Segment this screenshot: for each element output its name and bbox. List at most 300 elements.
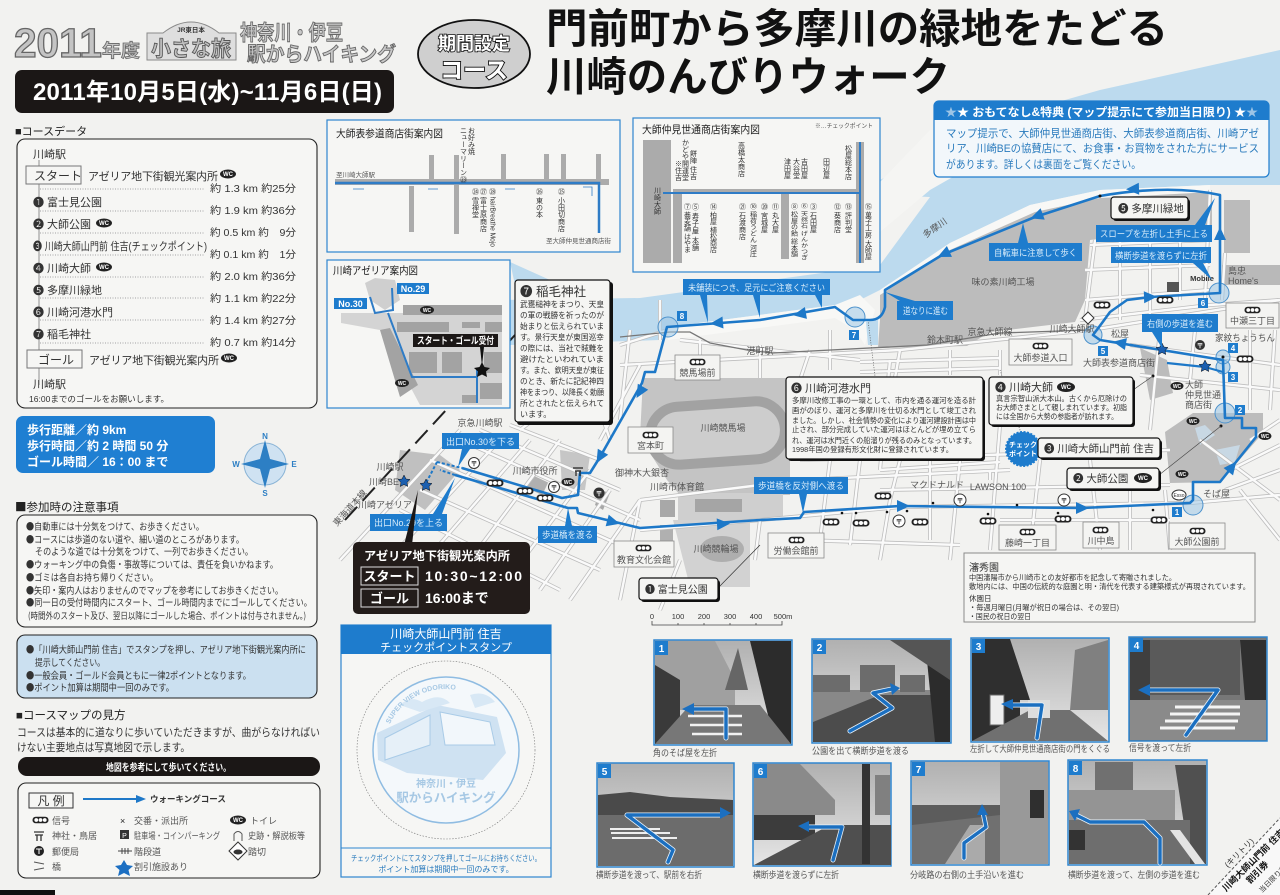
photo 8	[1068, 760, 1207, 865]
callout: 富士見公園: ❶ 富士見公園	[645, 583, 708, 596]
coupon corner: (キリトリ)	[1223, 836, 1256, 869]
legend: 割引施設あり	[134, 861, 188, 872]
caption 2: 公園を出て横断歩道を渡る	[812, 745, 909, 756]
panel: course data: WC	[99, 265, 110, 271]
main title	[546, 6, 1168, 100]
inset map: 大師仲見世通商店街: 吉田屋	[800, 158, 808, 180]
inset map: 大師仲見世通商店街: かどや開運堂	[682, 139, 689, 181]
signal stop labels: 川中島	[1087, 535, 1115, 546]
scale bar: 0	[650, 612, 654, 621]
map: place names: 味の素川崎工場	[971, 276, 1035, 287]
signal stop labels: 教育文化会館	[617, 554, 671, 565]
panel: course data: 約 0.5 km 約 9分	[210, 226, 296, 239]
inset map: 大師表参道商店街: ㉕ 小田切商店	[558, 188, 565, 233]
callout: 川崎河港水門: 画がのぼり、運河と多摩川を仕切る水門として竣工され	[792, 405, 976, 415]
map: place names: 仲見世通	[1185, 389, 1221, 400]
inset map: 大師仲見世通商店街: ⑳ 宮城屋	[760, 203, 768, 234]
scale bar	[650, 612, 792, 625]
inset map: 大師表参道商店街: 至大師仲見世通商店街	[546, 236, 612, 245]
panel: walking stats: 歩行時間／約 2 時間 50 分	[27, 438, 168, 453]
panel: course data: アゼリア地下街観光案内所	[88, 169, 218, 183]
inset map: 大師仲見世通商店街: 津田屋	[784, 158, 791, 180]
inset map: 大師仲見世通商店街: 大師仲見世通商店街案内図	[642, 123, 760, 136]
map: place names: 大師表参道商店街	[1083, 357, 1155, 368]
blue direction labels: 歩道橋を反対側へ渡る	[758, 480, 844, 491]
text block: how to read the map: けない主要地点は写真地図で示します。	[17, 740, 190, 754]
callout: 川崎大師: ❹ 川崎大師	[995, 380, 1053, 394]
map: place names: 松屋	[1111, 328, 1129, 339]
panel: cautions: ■参加時の注意事項	[15, 499, 119, 515]
panel: check point stamp	[340, 624, 552, 878]
callout: 大師公園: ❷ 大師公園	[1073, 472, 1128, 485]
legend: 階段道	[134, 846, 161, 857]
legend: 交番・派出所	[134, 815, 188, 826]
route point numbers: 4	[1231, 344, 1236, 353]
inset map: 川崎アゼリア: WC	[398, 381, 407, 387]
factory and grey blocks	[878, 192, 1212, 348]
photo 5	[597, 763, 734, 867]
callout: 稲毛神社: す。また、欽明天皇が東征	[520, 365, 604, 375]
legend: WC	[233, 818, 244, 824]
inset map: 大師仲見世通商店街: ⑮ 菓子工房 大師屋	[864, 203, 872, 261]
map: place names: 川崎市体育館	[650, 481, 704, 492]
panel: cautions: ●自動車には十分気をつけて、お歩きください。	[26, 519, 204, 533]
signal stop labels: 大師公園前	[1174, 536, 1220, 547]
caption 6: 横断歩道を渡らずに左折	[753, 869, 839, 880]
banner: use map: 地図を参考にして歩いてください。	[106, 761, 231, 774]
callout: 稲毛神社: います。	[520, 410, 551, 419]
photo 7: 7	[916, 765, 922, 776]
photo 8: 8	[1073, 764, 1079, 775]
header logo: 2011年度 JR東日本 小さな旅: 2011	[14, 20, 102, 66]
decorative edge	[0, 890, 55, 895]
inset map: 大師表参道商店街: ニューマリーン㉓	[460, 127, 467, 183]
panel: hospitality benefits: ★★ おもてなし&特典 (マップ提示にて参加当日限り) ★ ★	[945, 105, 1259, 119]
map: place names: LAWSON 100	[970, 482, 1026, 492]
legend: トイレ	[250, 816, 277, 826]
map: traffic signals and small icons: 〒	[1196, 343, 1204, 350]
route point numbers: 8	[680, 312, 685, 321]
badge: 期間設定コース	[418, 20, 530, 88]
panel: hospitality benefits	[934, 101, 1269, 177]
callout: 川崎河港水門	[786, 377, 985, 461]
date banner	[15, 70, 394, 113]
blue direction labels: 未舗装につき、足元にご注意ください	[688, 282, 825, 293]
panel: check point stamp: チェックポイントスタンプ	[380, 641, 512, 654]
stamp artwork: 駅からハイキング	[396, 790, 496, 805]
panel: cautions: ●ゴミは各自お持ち帰りください。	[26, 570, 158, 584]
caption 4: 信号を渡って左折	[1129, 742, 1191, 753]
callout: 川崎大師	[989, 376, 1153, 427]
map: racecourse and facilities	[395, 200, 1280, 587]
callout: 川崎大師山門前 住吉: ❸ 川崎大師山門前 住吉	[1044, 442, 1154, 455]
blue direction labels: 歩道橋を渡る	[542, 529, 593, 540]
legend: 神社・鳥居	[52, 830, 97, 841]
signal stop labels: 大師参道入口	[1013, 352, 1068, 363]
main title: 川崎のんびりウォーク	[546, 54, 950, 100]
callout: 川崎河港水門: ました。しかし、社会情勢の変化により運河建設計画は中	[792, 415, 976, 425]
route point numbers: 3	[1231, 373, 1236, 382]
callout: 川崎河港水門: ❻ 川崎河港水門	[791, 381, 871, 395]
badge: 期間設定コース: コース	[440, 57, 508, 83]
callout: 稲毛神社: 始まりと伝えられていま	[520, 321, 604, 331]
blue direction labels: 横断歩道を渡らずに左折	[1115, 250, 1207, 261]
inset map: 大師仲見世通商店街: ㉑ 石渡商店	[738, 203, 746, 241]
panel: cautions: ●ウォーキング中の負傷・事故等については、責任を負いかねます。	[26, 557, 278, 571]
info box: 瀋秀園	[964, 553, 1255, 622]
stamp artwork: SUPER VIEW ODORIKO	[386, 684, 456, 724]
blue direction labels	[370, 198, 1218, 543]
inset map: 大師仲見世通商店街: ※住吉	[674, 160, 682, 182]
callout: 川崎河港水門: 止され、部分完成していた運河はほとんどが埋め立てら	[792, 424, 976, 434]
map: place names	[330, 215, 1275, 554]
route direction arrows	[591, 183, 1241, 530]
route point numbers: 5	[1101, 347, 1106, 356]
map: place names: 川崎市役所	[512, 465, 558, 476]
panel: hospitality benefits: があります。詳しくは裏面をご覧ください。	[946, 157, 1141, 171]
panel: stamp notes: ●一般会員・ゴールド会員ともに一律2ポイントとなります。	[26, 668, 251, 682]
map: place names: そば屋	[1203, 489, 1230, 499]
callout: 川崎大師: には全国から大勢の参詣者が訪れます。	[996, 411, 1118, 421]
blue direction labels: 自転車に注意して歩く	[994, 247, 1077, 258]
map: place names: 大師	[1185, 379, 1203, 390]
photo 2	[812, 639, 951, 743]
inset map: 川崎アゼリア: WC	[423, 308, 432, 314]
panel: cautions: (時間外のスタート及び、翌日以降にゴールした場合、ポイントは付与されません。)	[28, 609, 306, 622]
callout: start and goal times: 10:30~12:00	[425, 568, 522, 584]
icon: compass	[232, 432, 297, 498]
date banner: 2011年10月5日(水)~11月6日(日)	[33, 79, 382, 106]
info box: 瀋秀園: 敷地内には、中国の伝統的な庭園と明・清代を代表する建築様式が再現されています。	[969, 581, 1250, 591]
inset map: 川崎アゼリア: 川崎アゼリア案内図	[333, 264, 418, 277]
blue direction labels: 出口No.30を下る	[446, 436, 515, 447]
panel: course data: 16:00までのゴールをお願いします。	[29, 394, 169, 404]
map: place names: Home's	[1228, 276, 1259, 286]
callout: 大師公園: WC	[1138, 476, 1149, 482]
photo 1	[654, 640, 792, 745]
banner: use map	[18, 757, 320, 776]
scale bar: 400	[750, 612, 762, 621]
inset map: 大師表参道商店街: 大師表参道商店街案内図	[336, 127, 443, 140]
inset map: 大師表参道商店街: ㉘ hairBreathe Mojo	[488, 188, 496, 247]
callout: 川崎大師: 真言宗智山派大本山。古くから厄除けの	[996, 393, 1127, 403]
inset map: 大師仲見世通商店街: ⑫ 葵商店	[834, 203, 841, 234]
map: place names: 港町駅	[746, 345, 774, 356]
map: place names: 川崎大師駅	[1049, 323, 1095, 334]
coupon corner: 割引券	[1244, 859, 1271, 885]
stamp artwork	[356, 660, 536, 840]
icon: compass: W	[232, 460, 240, 469]
panel: cautions: ●コースには歩道のない道や、細い道のところがあります。	[26, 532, 244, 546]
callout: 稲毛神社: 所とされたと伝えられて	[520, 398, 604, 408]
inset map: 大師仲見世通商店街: 松屋総本店	[844, 144, 852, 181]
panel: course data: ❸ 川崎大師山門前 住吉(チェックポイント)	[33, 239, 207, 253]
panel: course data: ❻ 川崎河港水門	[33, 305, 113, 319]
photo 2: 2	[817, 643, 823, 654]
map: traffic signals and small icons: 〒	[956, 498, 964, 505]
map base: river and land	[500, 50, 1280, 348]
blue direction labels: 出口No.29を上る	[374, 517, 443, 528]
info box: 瀋秀園: ・毎週月曜日(月曜が祝日の場合は、その翌日)	[969, 602, 1119, 612]
caption 1: 角のそば屋を左折	[653, 747, 717, 758]
scale bar: 500m	[774, 612, 792, 621]
map: place names: 川崎競馬場	[700, 422, 746, 433]
photo 3	[971, 638, 1109, 742]
header logo: 2011年度 JR東日本 小さな旅: 駅からハイキング	[247, 42, 396, 66]
signal stop labels	[614, 303, 1279, 567]
signal stop labels: 中瀬三丁目	[1230, 315, 1275, 326]
route point numbers: 7	[852, 331, 857, 340]
legend	[18, 783, 320, 878]
inset map: 大師表参道商店街: ㉖ 東の本	[536, 188, 543, 219]
inset map: 川崎アゼリア: No.29	[401, 284, 425, 294]
map: place names: 多摩川	[920, 215, 949, 240]
map: traffic signals and small icons: 〒	[550, 485, 558, 492]
icon: compass: S	[262, 489, 268, 498]
inset map: 大師仲見世通商店街: ※…チェックポイント	[815, 122, 873, 130]
info box: 瀋秀園: ・国民の祝日の翌日	[969, 611, 1031, 621]
photo 6	[753, 763, 891, 866]
inset map: 大師仲見世通商店街: ⑤ 寿子屋 本舗	[692, 203, 699, 252]
map: place names: 川崎アゼリア	[358, 499, 412, 510]
callout: start and goal times: 16:00まで	[425, 590, 489, 606]
panel: course data: WC	[223, 172, 234, 178]
caption 5: 横断歩道を渡って、駅前を右折	[596, 869, 702, 880]
route point numbers: 1	[1175, 508, 1180, 517]
caption 7: 分岐路の右側の土手沿いを進む	[910, 869, 1024, 880]
photo 4	[1129, 637, 1267, 741]
panel: course data: 川崎駅	[33, 377, 66, 391]
header logo: 2011年度 JR東日本 小さな旅: 小さな旅	[151, 38, 231, 61]
header logo: 2011年度 JR東日本 小さな旅: 年度	[102, 40, 140, 61]
inset map: 川崎アゼリア: スタート・ゴール受付	[417, 335, 494, 347]
legend: 史跡・解説板等	[248, 830, 305, 841]
legend: 橋	[52, 861, 61, 872]
map: place names: 商店街	[1185, 399, 1212, 410]
panel: course data: 川崎駅	[33, 147, 66, 161]
panel: stamp notes: ●「川崎大師山門前 住吉」でスタンプを押し、アゼリア地下街観光案内所に	[26, 642, 306, 656]
info box: 瀋秀園: 中国瀋陽市から川崎市との友好都市を記念して寄贈されました。	[969, 572, 1176, 582]
panel: hospitality benefits: マップ提示で、大師仲見世通商店街、大師表参道商店街、川崎アゼ	[946, 126, 1259, 140]
caption 3: 左折して大師仲見世通商店街の門をくぐる	[970, 743, 1110, 754]
panel: check point stamp: 川崎大師山門前 住吉	[390, 626, 502, 641]
inset map: 大師表参道商店街: ㉗ 富士原商店	[480, 188, 487, 233]
route point numbers: 2	[1238, 406, 1243, 415]
map: place names: 京急川崎駅	[457, 417, 503, 428]
panel: cautions	[15, 499, 317, 627]
signal stop labels: 藤崎一丁目	[1005, 537, 1050, 548]
map: place names: 川崎駅	[376, 461, 404, 472]
map: traffic signals and small icons: WC	[1261, 434, 1270, 440]
callout: 稲毛神社: 神をまつり、以降長く勅願	[520, 387, 604, 397]
map: traffic signals and small icons: 〒	[896, 519, 902, 526]
panel: stamp notes: ●ポイント加算は期間中一回のみです。	[26, 680, 174, 694]
panel: walking stats: 歩行距離／約 9km	[27, 422, 126, 437]
check point badge	[1006, 432, 1040, 466]
map: traffic signals and small icons: WC	[1173, 384, 1182, 390]
header logo: 2011年度 JR東日本 小さな旅: JR東日本	[177, 25, 205, 34]
panel: check point stamp: チェックポイントにてスタンプを押してゴールにお持ちください。	[351, 853, 541, 863]
panel: cautions: ●同一日の受付時間内にスタート、ゴール時間内までにゴールしてください。	[26, 595, 312, 609]
map: point circles	[658, 283, 1235, 515]
map: traffic signals and small icons: 〒	[596, 491, 602, 498]
signal stop labels: 競馬場前	[679, 367, 716, 378]
caption 8: 横断歩道を渡って、左側の歩道を進む	[1068, 869, 1200, 880]
panel: course data: ■コースデータ	[15, 124, 87, 138]
inset map: 大師仲見世通商店街: ⑦ 蕎麦舗 はやま	[684, 203, 691, 253]
info box: 瀋秀園: 瀋秀園	[969, 561, 999, 574]
legend: 駐車場・コインパーキング	[134, 830, 220, 841]
text block: how to read the map: コースは基本的に道なりに歩いていただきますが、曲がらなければい	[17, 725, 320, 739]
panel: check point stamp: ポイント加算は期間中一回のみです。	[378, 864, 514, 874]
panel: course data: スタート	[34, 169, 82, 183]
panel: course data: 約 2.0 km 約36分	[210, 270, 296, 283]
map: place names: 御神木大銀杏	[615, 467, 669, 478]
signal stop labels: 労働会館前	[773, 545, 819, 556]
legend: 踏切	[248, 846, 266, 857]
photo 6: 6	[758, 767, 764, 778]
check point badge: ポイント	[1009, 450, 1037, 458]
callout: 大師公園	[1067, 426, 1221, 491]
inset map: 大師仲見世通商店街: ⑥ 天然石 げんかつぎ	[800, 203, 808, 260]
map: traffic signals and small icons: 〒	[1060, 498, 1068, 505]
map: place names: 家紋ちょうちん	[1215, 332, 1275, 343]
callout: 稲毛神社: の軍の戦勝を祈ったのが	[520, 310, 604, 320]
legend: ×	[120, 816, 125, 826]
info box: 瀋秀園: 休園日	[969, 593, 992, 603]
map: traffic signals and small icons: WC	[564, 480, 573, 486]
inset map: 大師仲見世通商店街: 川崎大師	[654, 187, 661, 216]
panel: course data: ❼ 稲毛神社	[33, 327, 91, 341]
callout: 稲毛神社: ❼ 稲毛神社	[520, 284, 586, 299]
panel: hospitality benefits: リア、川崎BEの協賛店にて、お食事・お買物をされた方にサービス	[946, 141, 1259, 155]
legend: ウォーキングコース	[150, 794, 226, 804]
inset map: 大師仲見世通商店街: ⑩ 稲荷うどん 河庄	[750, 203, 757, 258]
callout: start and goal times: アゼリア地下街観光案内所	[364, 548, 510, 563]
callout: 稲毛神社: 武甕槌神をまつり、天皇	[520, 299, 604, 309]
panel: course data: アゼリア地下街観光案内所	[89, 353, 219, 367]
map: traffic signals and small icons: WC	[1189, 419, 1198, 425]
inset map: 大師仲見世通商店街: ③ 石田屋	[810, 203, 817, 234]
header logo: 2011年度 JR東日本 小さな旅: 神奈川・伊豆	[240, 22, 343, 45]
panel: course data	[15, 124, 317, 408]
map: place names: 島忠	[1228, 265, 1246, 276]
text block: how to read the map	[16, 708, 320, 754]
panel: cautions: ●矢印・案内人はおりませんのでマップを参考にしてお歩きください。	[26, 583, 283, 597]
inset map: 大師仲見世通商店街: 大谷堂	[792, 157, 800, 179]
check point badge: チェック	[1009, 440, 1037, 449]
inset map: 大師仲見世通商店街: 餅陣 住吉	[690, 149, 697, 181]
panel: course data: WC	[224, 356, 235, 362]
panel: course data: 約 1.4 km 約27分	[210, 314, 296, 327]
legend: 郵便局	[52, 846, 79, 857]
panel: course data: ❷ 大師公園	[33, 217, 91, 231]
photo 3: 3	[976, 642, 982, 653]
legend: 信号	[52, 815, 70, 826]
scale bar: 100	[672, 612, 684, 621]
callout: 川崎河港水門: 多摩川改修工事の一環として、市内を通る運河を造る計	[792, 395, 976, 405]
header logo: 2011年度 JR東日本 小さな旅	[14, 20, 396, 66]
map: place names: 鈴木町駅	[927, 334, 963, 345]
panel: course data: 約 1.3 km 約25分	[210, 182, 296, 195]
blue direction labels: スロープを左折し土手に上る	[1100, 228, 1208, 239]
callout: 稲毛神社	[515, 280, 613, 425]
panel: walking stats	[16, 416, 215, 473]
inset map: 大師表参道商店街	[327, 120, 620, 252]
map: place names: 川崎BE	[369, 476, 399, 487]
stamp artwork: 神奈川・伊豆	[416, 777, 476, 790]
scale bar: 300	[724, 612, 736, 621]
inset map: 大師表参道商店街: 至川崎大師駅	[336, 170, 376, 179]
callout: start and goal times	[353, 490, 530, 614]
callout: 稲毛神社: のとき、新たに記紀神四	[520, 376, 604, 386]
blue direction labels: 右側の歩道を進む	[1147, 318, 1213, 329]
panel: walking stats: ゴール時間／ 16：00 まで	[27, 454, 168, 469]
panel: course data: ゴール	[38, 352, 74, 367]
route point numbers: 6	[1201, 299, 1206, 308]
callout: 川崎大師: お大師さまとして親しまれています。初詣	[996, 402, 1127, 412]
panel: course data: ❶ 富士見公園	[33, 196, 102, 209]
map: railway	[345, 320, 1090, 520]
map: place names: マクドナルド	[910, 480, 964, 490]
map: traffic signals and small icons: 〒	[470, 461, 478, 468]
photo 5: 5	[602, 767, 608, 778]
scale bar: 200	[698, 612, 710, 621]
inset map: 大師仲見世通商店街	[633, 118, 880, 272]
panel: course data: 約 0.1 km 約 1分	[210, 248, 296, 261]
inset map: 川崎アゼリア: No.30	[338, 299, 363, 309]
walking route	[425, 190, 1256, 528]
map: place names: 東海道本線	[330, 487, 369, 528]
callout: 富士見公園	[639, 545, 760, 602]
callout: 川崎河港水門: れ、運河は水門近くの船溜りが残るのみとなっています。	[792, 435, 976, 445]
map: road network	[340, 190, 1280, 610]
photo 4: 4	[1134, 641, 1140, 652]
panel: cautions: そのような道では十分気をつけて、一列でお歩きください。	[35, 544, 253, 558]
callout: 多摩川緑地	[1111, 197, 1190, 221]
panel: course data: WC	[99, 221, 110, 227]
inset map: 川崎アゼリア	[327, 260, 510, 408]
photo 1: 1	[659, 644, 665, 655]
map: traffic signals and small icons: WC	[1178, 472, 1187, 478]
text block: how to read the map: ■コースマップの見方	[16, 708, 126, 722]
signal stop labels: 宮本町	[637, 440, 664, 451]
inset map: 大師仲見世通商店街: ⑧ 松屋の飴 総本舗	[790, 203, 798, 258]
inset map: 大師仲見世通商店街: ⑬ 評判堂	[844, 203, 852, 233]
callout: start and goal times: スタート	[363, 569, 416, 584]
callout: 稲毛神社: 避けたといわれていま	[520, 355, 604, 364]
inset map: 大師表参道商店街: お好み焼	[468, 127, 475, 156]
inset map: 大師表参道商店街: ㉔ 雪禅堂	[472, 188, 479, 218]
panel: course data: ❹ 川崎大師	[33, 261, 91, 275]
inset map: 大師仲見世通商店街: ⑭ 柏屋 植松商店	[710, 203, 717, 254]
icon: compass: N	[262, 432, 268, 441]
panel: course data: 約 0.7 km 約14分	[210, 336, 296, 349]
panel: course data: 約 1.1 km 約22分	[210, 292, 296, 305]
callout: 川崎大師: WC	[1061, 385, 1072, 391]
inset map: 大師仲見世通商店街: 田辺屋	[822, 158, 830, 180]
route point numbers	[677, 298, 1245, 517]
map: place names: 川崎競輪場	[693, 543, 739, 554]
map: place names: Mobile	[1190, 274, 1214, 283]
callout: 川崎河港水門: 1998年国の登録有形文化財に登録されています。	[792, 444, 953, 454]
panel: stamp notes	[17, 635, 317, 698]
callout: 多摩川緑地: ❺ 多摩川緑地	[1118, 202, 1184, 215]
panel: course data: 約 1.9 km 約36分	[210, 204, 296, 217]
legend: P	[122, 833, 127, 840]
legend: 凡 例	[37, 794, 65, 808]
inset map: 大師仲見世通商店街: ⑪ 丸大屋	[772, 203, 779, 234]
